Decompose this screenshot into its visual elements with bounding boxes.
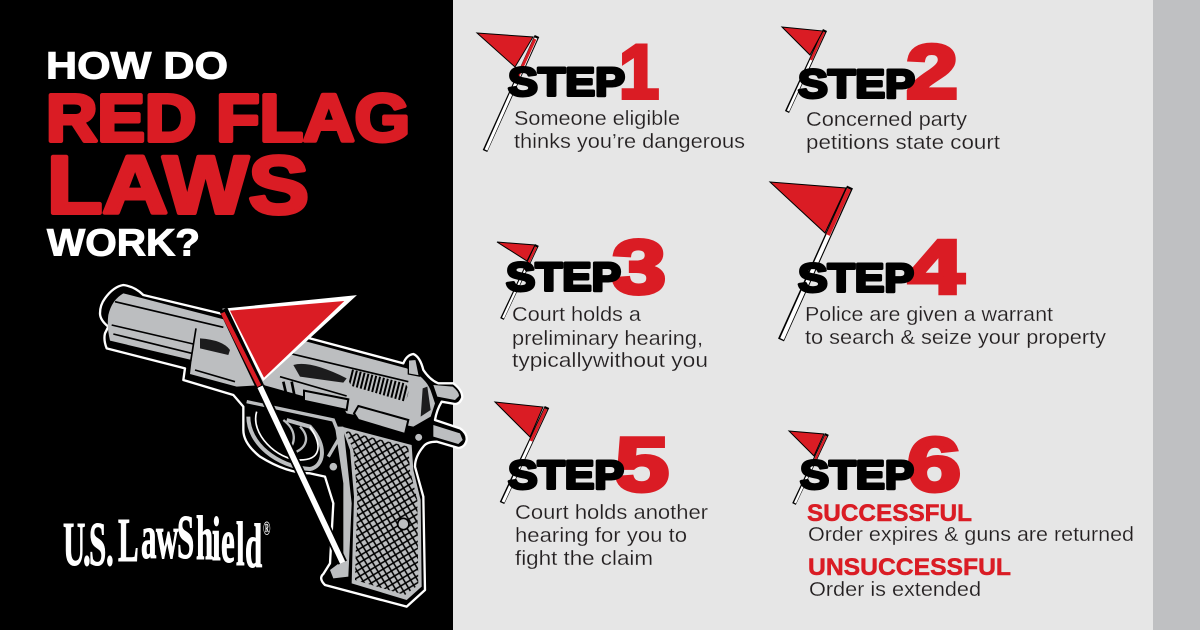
frame side windows <box>304 391 408 434</box>
panel: black title panel <box>0 0 453 630</box>
step text: Court holds a <box>512 304 642 326</box>
pistol silhouette <box>100 285 467 607</box>
step text <box>805 304 1106 349</box>
step text: preliminary hearing, <box>512 328 703 350</box>
step text: hearing for you to <box>515 525 687 547</box>
slide serrations <box>348 369 408 402</box>
flag icon <box>770 182 850 340</box>
step label: STEP <box>506 256 621 300</box>
logo: U.S. LawShield: U.S. LawShield® <box>63 502 271 581</box>
title: RED FLAG <box>46 81 410 156</box>
step text <box>512 304 708 372</box>
successful outcome <box>807 500 1134 546</box>
step text: Concerned party <box>806 109 967 131</box>
number: 4 <box>908 225 964 310</box>
step text: Court holds another <box>515 502 708 524</box>
panel: right grey band <box>1153 0 1200 630</box>
unsuccessful outcome: UNSUCCESSFUL <box>808 554 1011 581</box>
flag icon <box>497 242 537 319</box>
hammer and beavertail <box>433 385 463 444</box>
step text: Someone eligible <box>514 108 680 130</box>
step label: STEP <box>508 60 625 104</box>
step text <box>514 108 745 153</box>
step 6 <box>789 423 1134 601</box>
trigger guard <box>247 402 340 469</box>
pistol slide and barrel <box>108 293 435 427</box>
step 2 <box>782 27 1000 154</box>
screws <box>329 433 423 530</box>
title: WORK? <box>47 222 200 264</box>
successful outcome: Order expires & guns are returned <box>808 524 1134 546</box>
rear sight <box>408 359 419 376</box>
number: 6 <box>907 423 961 508</box>
flag icon <box>477 33 537 151</box>
step 5 <box>495 402 708 570</box>
step label: STEP <box>508 454 624 498</box>
step text: to search & seize your property <box>805 327 1106 349</box>
checkered grip <box>345 431 418 595</box>
step text: Police are given a warrant <box>805 304 1053 326</box>
number: 5 <box>615 423 669 508</box>
step text: petitions state court <box>806 132 1000 154</box>
panel: steps background <box>453 0 1153 630</box>
flag icon <box>789 431 827 504</box>
unsuccessful outcome <box>808 554 1011 601</box>
flag icon <box>782 27 825 112</box>
successful outcome: SUCCESSFUL <box>807 500 972 527</box>
step 3 <box>497 225 708 372</box>
grip panel <box>342 427 422 600</box>
step text <box>515 502 708 570</box>
unsuccessful outcome: Order is extended <box>809 579 981 601</box>
number: 1 <box>619 30 659 115</box>
step text: typicallywithout you <box>512 350 708 372</box>
title <box>46 46 410 264</box>
number: 3 <box>612 225 666 310</box>
step text: thinks you’re dangerous <box>514 131 745 153</box>
step label: STEP <box>798 62 915 106</box>
step label: STEP <box>800 454 914 498</box>
step 1 <box>477 30 745 153</box>
step 4 <box>770 182 1106 349</box>
step text: fight the claim <box>515 548 653 570</box>
step label: STEP <box>798 256 914 300</box>
title: LAWS <box>47 140 309 231</box>
step text <box>806 109 1000 154</box>
flag icon <box>495 402 547 503</box>
frame front strap <box>330 427 352 578</box>
title: HOW DO <box>46 46 228 88</box>
number: 2 <box>906 30 958 115</box>
illustration: pistol with red flag <box>100 285 467 607</box>
flag on pistol <box>223 296 355 563</box>
